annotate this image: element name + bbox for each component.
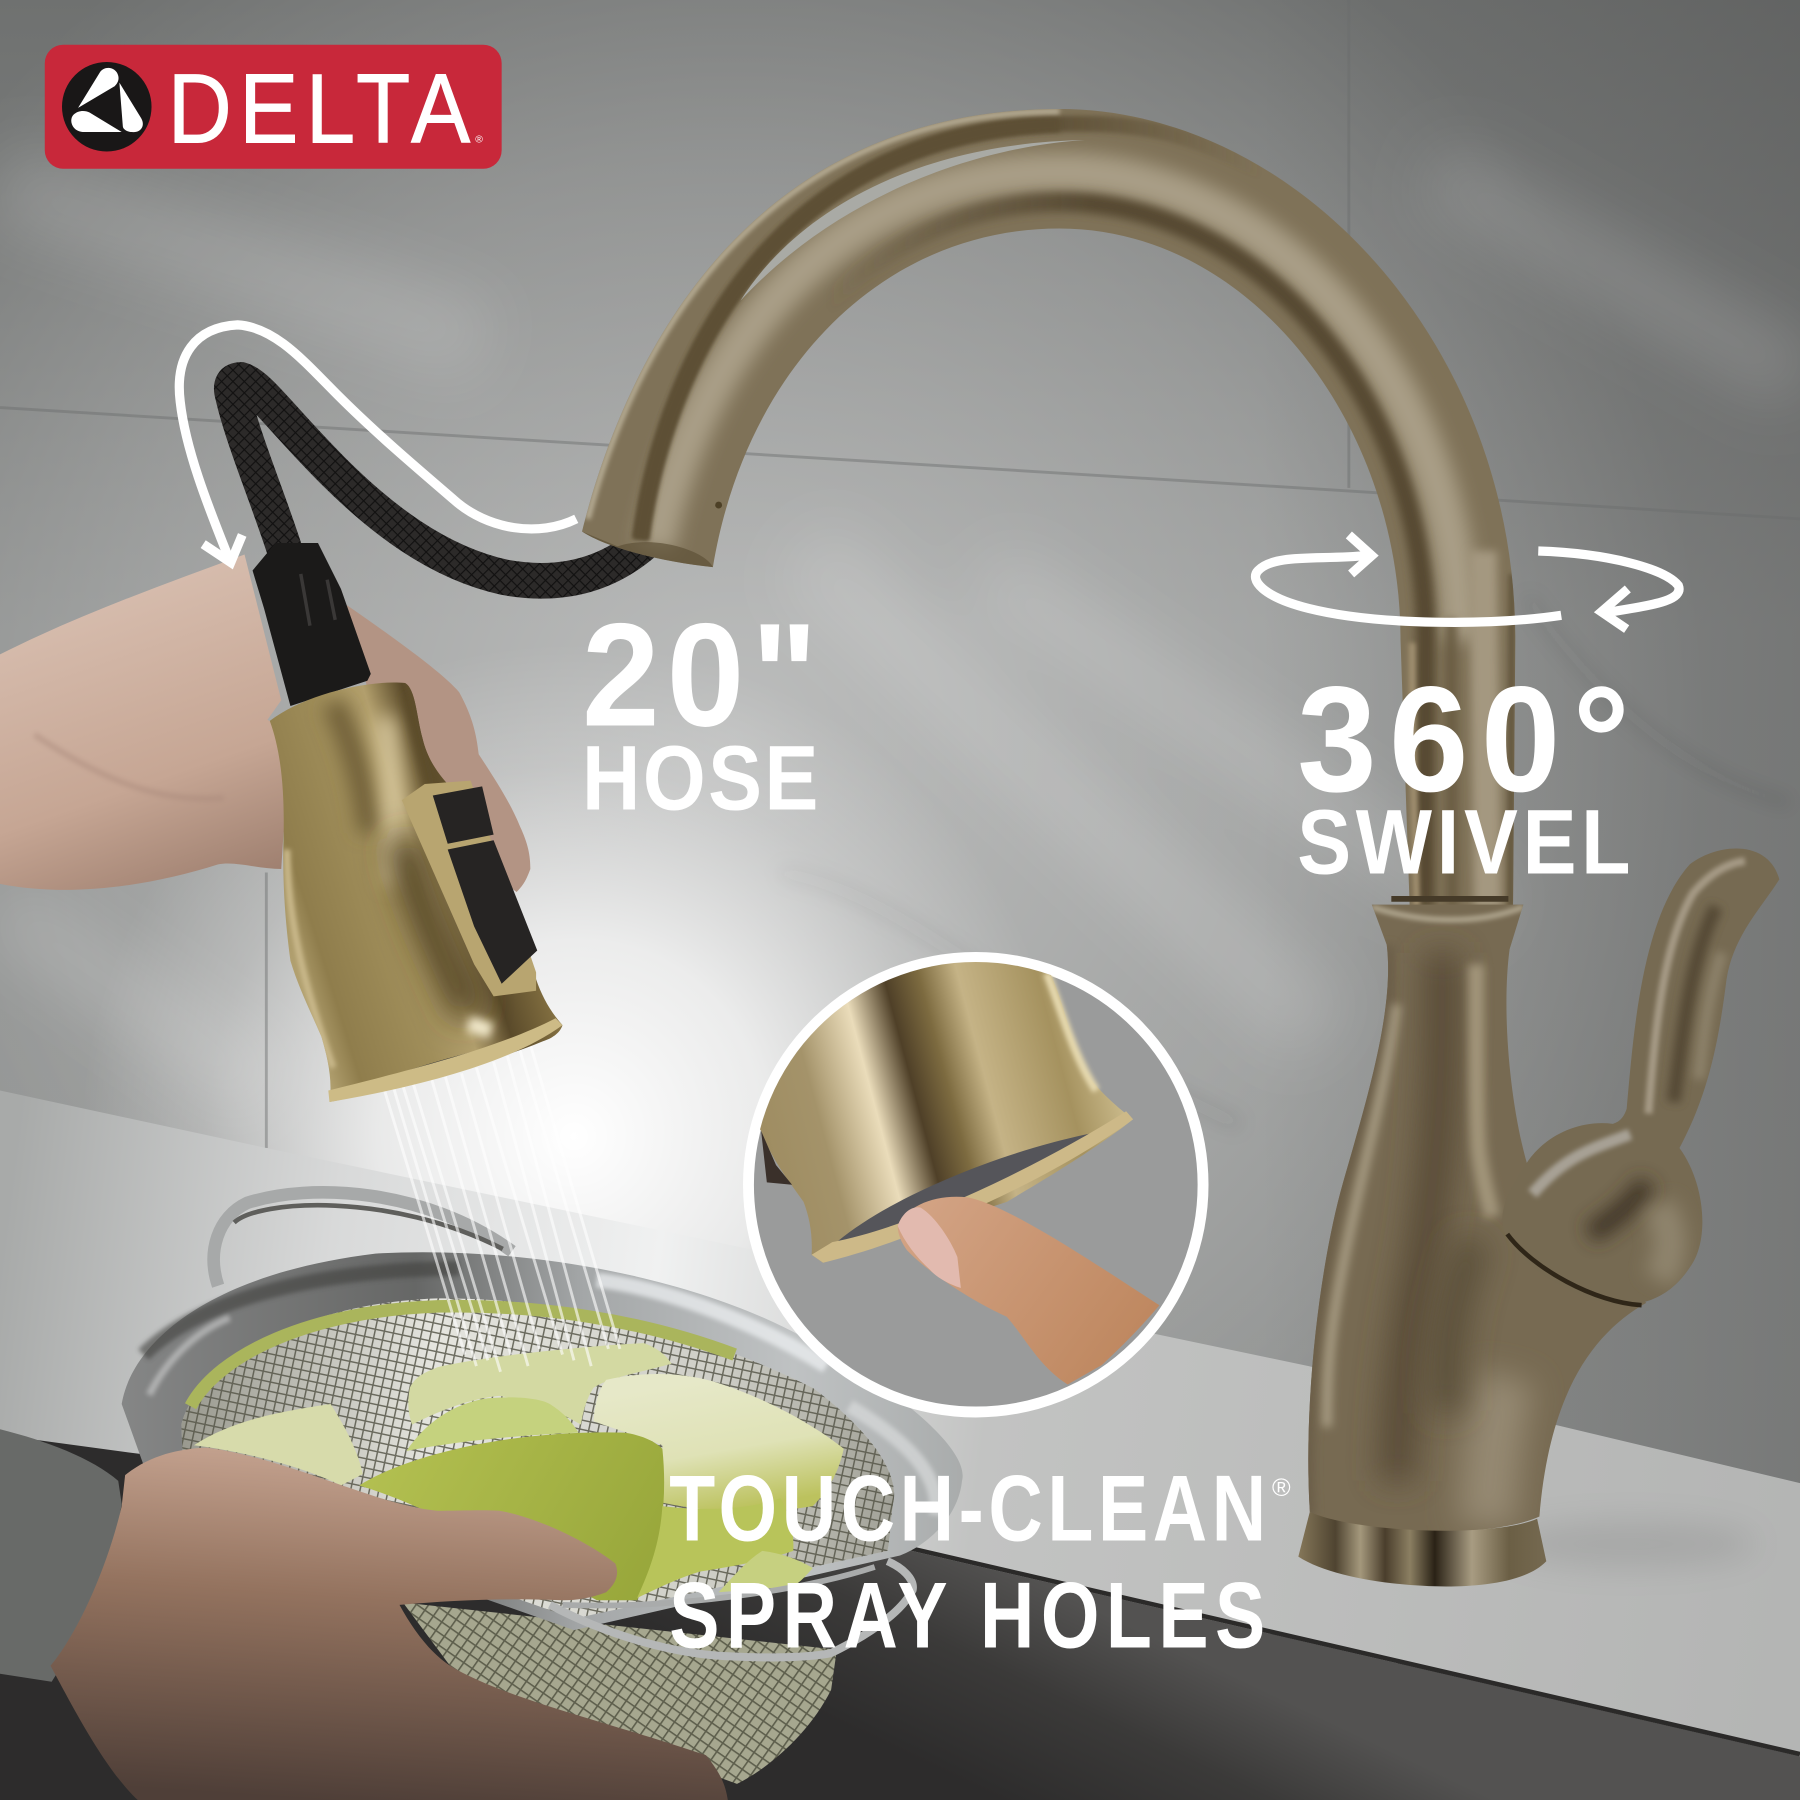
sweater sleeve: [0, 1429, 122, 1682]
finger: [898, 1197, 1159, 1384]
hose length label: 20": [582, 593, 818, 757]
touch-clean label: [669, 1457, 1291, 1668]
button plate: [402, 781, 536, 996]
collar line: [1391, 896, 1508, 901]
logo badge: ®: [475, 134, 483, 145]
spray button: [433, 786, 537, 984]
colander: [122, 1252, 963, 1784]
inset spray head: [752, 953, 1133, 1263]
countertop: [0, 1091, 1800, 1800]
spray face: [347, 1037, 540, 1091]
colander lower rim: [550, 1561, 913, 1657]
faucet body: [1298, 899, 1646, 1586]
wordmark: DELTA: [168, 53, 471, 163]
colander handle: [214, 1192, 512, 1286]
faucet spout: [582, 109, 1515, 907]
lower hand: [51, 1448, 728, 1800]
upper hand: [0, 554, 530, 892]
touch-clean label: SPRAY HOLES: [669, 1563, 1265, 1668]
logo badge: [45, 45, 502, 169]
water spray: [385, 1045, 620, 1372]
logo mark: [62, 62, 152, 152]
hose length label: [582, 593, 818, 829]
faucet handle: [1502, 848, 1779, 1305]
handle seam: [1507, 1234, 1642, 1305]
spray head: [270, 683, 562, 1102]
spray head connector: [253, 543, 371, 706]
inset spray face: [838, 1131, 1104, 1241]
hose motion arrow: [179, 325, 576, 562]
touch-clean label: ®: [1272, 1474, 1291, 1502]
hose length label: HOSE: [582, 728, 818, 829]
swivel motion arrows: [1255, 535, 1679, 629]
pull-down hose: [232, 380, 645, 581]
swivel label: 360°: [1297, 656, 1630, 824]
apple slices: [194, 1343, 844, 1600]
swivel label: SWIVEL: [1297, 792, 1631, 894]
touch-clean label: TOUCH-CLEAN: [669, 1457, 1266, 1562]
inset: touch-clean detail: [748, 953, 1203, 1412]
base ring: [1298, 1512, 1546, 1586]
